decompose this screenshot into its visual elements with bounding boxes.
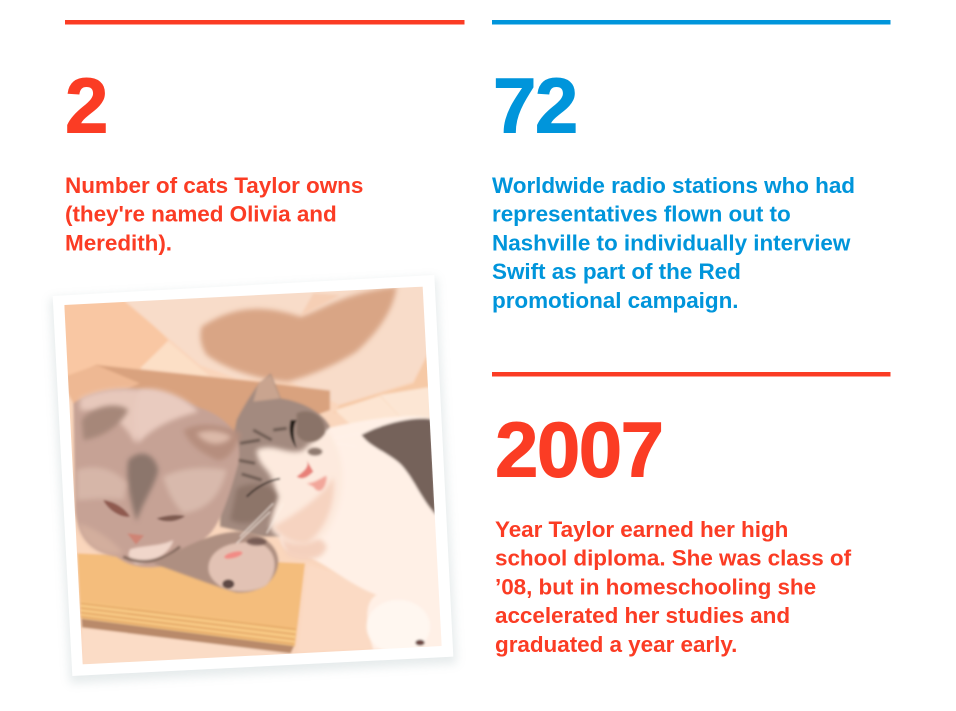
sheets lower	[346, 581, 371, 637]
whiskers	[236, 502, 274, 544]
text: diploma description: Year Taylor earned her high	[495, 517, 788, 542]
cat photo	[60, 283, 450, 670]
grey cat	[73, 389, 239, 567]
rule: diploma stat	[492, 372, 890, 376]
number: 2007: 2007	[495, 406, 663, 494]
panel: diploma stat	[492, 372, 890, 657]
text: cats description: (they're named Olivia and	[65, 202, 337, 227]
text: radio description: Swift as part of the Red	[492, 259, 741, 284]
text: diploma description: accelerated her studies and	[495, 603, 790, 628]
text: diploma description: ’08, but in homeschooling she	[495, 574, 816, 599]
panel: cats stat	[50, 20, 464, 683]
book	[77, 553, 305, 647]
text: cats description: Meredith).	[65, 230, 172, 255]
text: radio description: promotional campaign.	[492, 288, 738, 313]
text: diploma description: school diploma. She was class of	[495, 546, 852, 571]
number: 72: 72	[493, 62, 577, 150]
photo: two sleeping cats in tilted white frame	[50, 275, 457, 683]
text: radio description: Worldwide radio stations who had	[492, 173, 855, 198]
text: radio description: representatives flown out to	[492, 202, 791, 227]
sheets	[64, 302, 168, 376]
arm and paw	[153, 532, 278, 593]
panel: radio stations stat	[492, 20, 890, 313]
text: cats description: Number of cats Taylor owns	[65, 173, 363, 198]
kitten head	[220, 373, 330, 537]
frame shadow	[50, 277, 457, 683]
rule: radio stat	[492, 20, 890, 24]
rule: cats stat	[65, 20, 464, 24]
cardboard	[98, 364, 332, 432]
white frame	[53, 275, 453, 676]
text: radio description: Nashville to individually interview	[492, 230, 851, 255]
text: diploma description: graduated a year early.	[495, 632, 737, 657]
kitten body	[280, 416, 444, 650]
number: 2: 2	[65, 62, 107, 150]
